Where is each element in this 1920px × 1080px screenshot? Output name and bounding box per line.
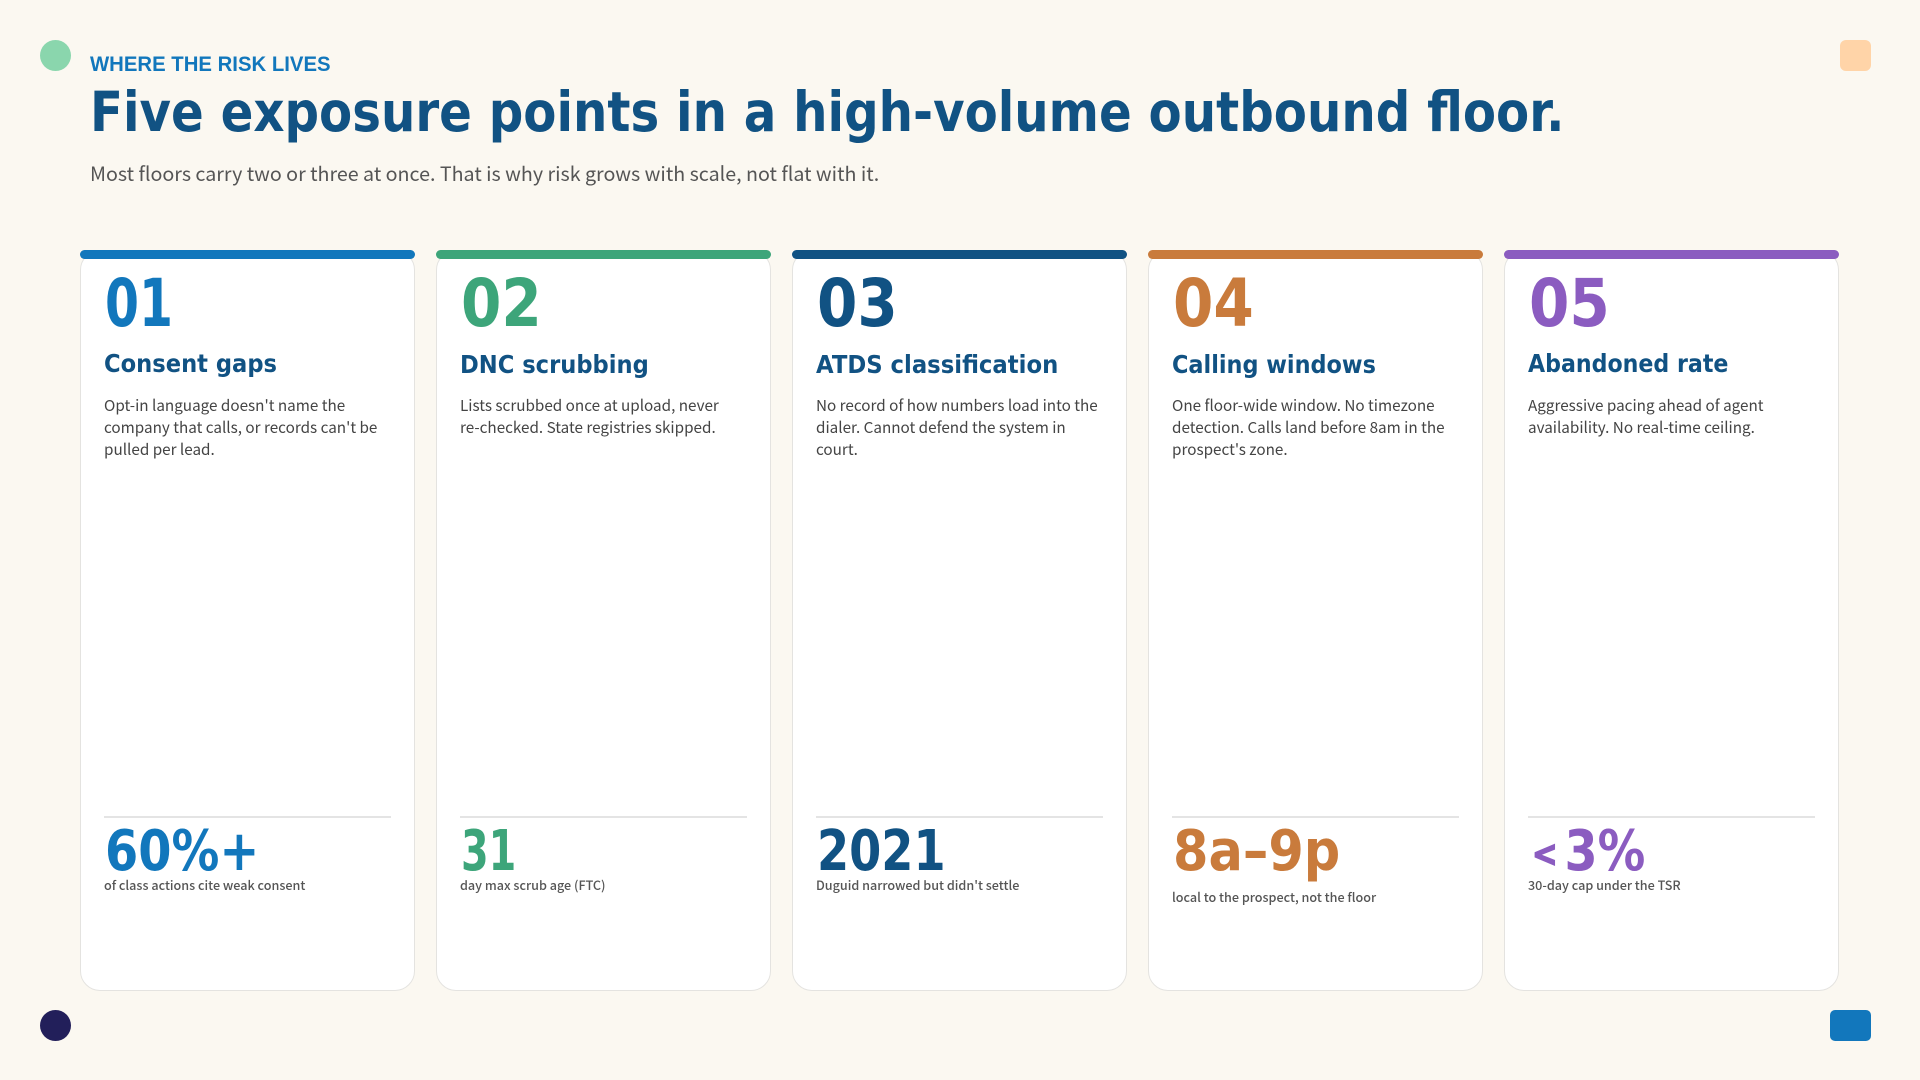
description <box>816 394 1098 460</box>
stat label: of class actions cite weak consent <box>104 875 305 894</box>
divider <box>816 816 1103 818</box>
divider <box>104 816 391 818</box>
accent bar <box>1504 250 1838 258</box>
description: detection. Calls land before 8am in the <box>1172 416 1445 438</box>
description <box>104 394 377 460</box>
description: One floor-wide window. No timezone <box>1172 394 1435 416</box>
description: prospect's zone. <box>1172 438 1288 460</box>
title: Five exposure points in a high-volume outbound floor. <box>90 80 1565 144</box>
accent bar <box>1148 250 1482 258</box>
stat label: local to the prospect, not the floor <box>1172 887 1376 906</box>
divider <box>460 816 747 818</box>
decorative navy circle <box>40 1010 71 1041</box>
number: 03 <box>817 265 898 342</box>
heading: Abandoned rate <box>1528 349 1728 378</box>
panel: consent gaps <box>80 250 415 991</box>
description: Opt-in language doesn't name the <box>104 394 345 416</box>
stat: 2021 <box>817 819 946 884</box>
description <box>460 394 719 438</box>
number: 05 <box>1529 265 1610 342</box>
stat: 60%+ <box>105 819 259 884</box>
description: dialer. Cannot defend the system in <box>816 416 1066 438</box>
heading: DNC scrubbing <box>460 350 649 379</box>
panel: ATDS classification <box>792 250 1127 991</box>
description: availability. No real-time ceiling. <box>1528 416 1755 438</box>
subtitle: Most floors carry two or three at once. That is why risk grows with scale, not flat with it. <box>90 158 879 187</box>
divider <box>1172 816 1459 818</box>
decorative peach square <box>1840 40 1871 71</box>
heading: Consent gaps <box>104 349 277 378</box>
description: Aggressive pacing ahead of agent <box>1528 394 1764 416</box>
heading: Calling windows <box>1172 350 1376 379</box>
description: court. <box>816 438 858 460</box>
stat: 31 <box>461 819 516 884</box>
number: 01 <box>105 265 173 342</box>
divider <box>1528 816 1815 818</box>
stat label: Duguid narrowed but didn't settle <box>816 875 1019 894</box>
description <box>1528 394 1764 438</box>
accent bar <box>792 250 1126 258</box>
accent bar <box>436 250 770 258</box>
number: 04 <box>1173 265 1254 342</box>
decorative mint circle <box>40 40 71 71</box>
eyebrow: WHERE THE RISK LIVES <box>90 53 331 76</box>
stat label: day max scrub age (FTC) <box>460 875 606 894</box>
description: No record of how numbers load into the <box>816 394 1098 416</box>
description: Lists scrubbed once at upload, never <box>460 394 719 416</box>
heading: ATDS classification <box>816 350 1058 379</box>
number: 02 <box>461 265 542 342</box>
panel: calling windows <box>1148 250 1483 991</box>
decorative blue rectangle <box>1830 1010 1871 1041</box>
description: re-checked. State registries skipped. <box>460 416 716 438</box>
description: pulled per lead. <box>104 438 215 460</box>
description <box>1172 394 1445 460</box>
accent bar <box>80 250 414 258</box>
stat: <3% <box>1532 819 1645 884</box>
stat label: 30-day cap under the TSR <box>1528 875 1681 894</box>
stat: 8a–9p <box>1173 819 1340 884</box>
panel: abandoned rate <box>1504 250 1839 991</box>
panel: DNC scrubbing <box>436 250 771 991</box>
description: company that calls, or records can't be <box>104 416 377 438</box>
